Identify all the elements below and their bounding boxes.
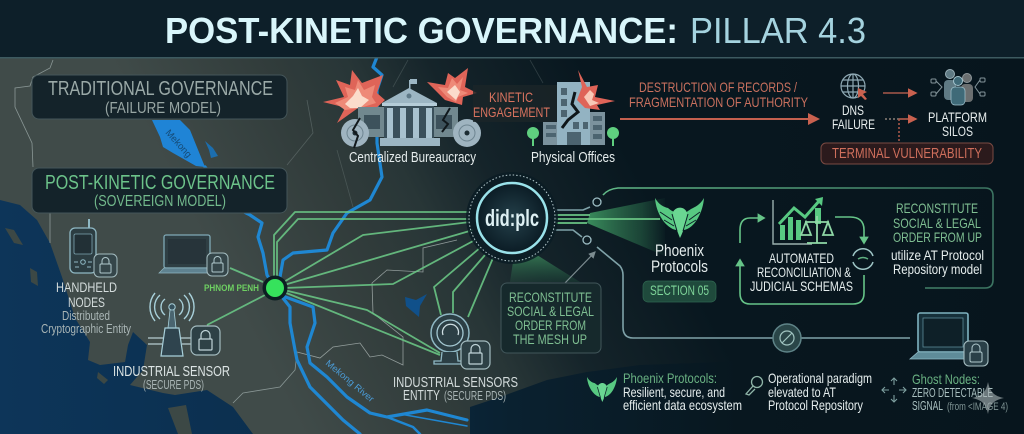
data discs (341, 119, 369, 147)
arrow: destruction to DNS failure (620, 118, 818, 120)
arrow: terminal vulnerability link (885, 119, 916, 143)
label: industrial sensors entity: ENTITY (403, 388, 440, 404)
title: PILLAR 4.3 (690, 10, 866, 51)
label: handheld nodes (41, 279, 131, 336)
legend: operational paradigm: Operational paradigm (768, 370, 872, 386)
node: did:plc (466, 172, 558, 264)
text: reconstitute from up: RECONSTITUTE (896, 200, 978, 216)
icon: sync (853, 249, 873, 269)
label: DNS failure: DNS (842, 102, 864, 118)
callout: terminal vulnerability (821, 143, 993, 164)
icon: sparkle watermark (972, 382, 1004, 414)
text: reconstitute from up: Repository model (893, 261, 982, 277)
icon: DNS globe (841, 74, 867, 100)
callout: kinetic engagement: ENGAGEMENT (473, 104, 550, 120)
callout: terminal vulnerability: TERMINAL VULNERABILITY (832, 145, 982, 162)
lake: Mekong (152, 120, 218, 167)
panel: post-kinetic governance label: POST-KINETIC GOVERNANCE (45, 172, 275, 194)
icon: physical offices (527, 70, 619, 146)
connection lines from did:plc (553, 188, 993, 338)
loop arrows (740, 217, 864, 304)
inland lake (405, 294, 427, 317)
lake: Mekong: Mekong (163, 128, 194, 160)
callout: reconstitute from the mesh up: ORDER FROM (515, 317, 586, 333)
legend: operational paradigm (768, 370, 872, 413)
title: POST-KINETIC GOVERNANCE: (165, 10, 678, 51)
label: industrial sensors entity (393, 375, 518, 404)
label: handheld nodes: Cryptographic Entity (41, 321, 131, 336)
text: automated reconciliation: JUDICIAL SCHEMAS (750, 278, 853, 294)
icon: chart and scales (773, 197, 833, 244)
legend: phoenix protocols: Phoenix Protocols: (623, 370, 717, 386)
callout arrow to key node (565, 252, 595, 283)
label: industrial sensor: (SECURE PDS) (143, 378, 204, 392)
building portico (384, 106, 434, 139)
label: DNS failure (832, 102, 875, 132)
icon: small phoenix (587, 377, 617, 402)
icon: laptop node (159, 235, 228, 276)
icon: ghost laptop with lock (910, 313, 988, 366)
rivers (205, 57, 467, 434)
hub: Phnom Penh (204, 276, 288, 300)
icon: industrial sensors entity camera (431, 314, 490, 369)
icon: platform silos people (931, 70, 985, 105)
label: handheld nodes: HANDHELD (56, 279, 117, 295)
callout: kinetic engagement: KINETIC (489, 89, 533, 105)
legend: phoenix protocols: efficient data ecosystem (623, 397, 742, 413)
icon: industrial sensor (148, 293, 220, 356)
icon: blocked circle (773, 324, 801, 352)
text: automated reconciliation: AUTOMATED (769, 250, 834, 266)
callout: reconstitute from the mesh up: RECONSTITUTE (509, 289, 592, 305)
label: DNS failure: FAILURE (832, 116, 875, 132)
explosion and building: centralized bureaucracy (323, 68, 481, 148)
map land mass (0, 57, 780, 434)
badge: section 05 (643, 281, 716, 302)
label: centralized bureaucracy: Centralized Bureaucracy (349, 150, 477, 166)
text: automated reconciliation (750, 250, 853, 294)
text: reconstitute from up: utilize AT Protocol (891, 247, 984, 263)
callout: kinetic engagement (473, 85, 557, 122)
callout: reconstitute from the mesh up: SOCIAL & LEGAL (507, 303, 594, 319)
text: automated reconciliation: RECONCILIATION & (757, 264, 851, 280)
label: handheld nodes: Distributed (62, 308, 110, 323)
icon: four-way arrows (882, 378, 906, 402)
river label: Mekong River (324, 358, 376, 404)
label: industrial sensor (113, 364, 230, 392)
legend: operational paradigm: elevated to AT (768, 384, 836, 400)
header band (0, 0, 1024, 58)
map islands (5, 228, 192, 434)
label: phoenix protocols: Protocols (651, 257, 708, 276)
mesh lines (207, 212, 493, 355)
label: industrial sensors entity: (SECURE PDS) (444, 389, 506, 403)
panel: traditional governance label (32, 75, 287, 119)
legend: ghost nodes: Ghost Nodes: (912, 371, 980, 387)
label: industrial sensor: INDUSTRIAL SENSOR (113, 364, 230, 380)
callout: reconstitute from the mesh up (501, 283, 601, 353)
text: destruction of records: FRAGMENTATION OF AUTHORITY (629, 94, 809, 110)
label: platform silos: SILOS (942, 123, 973, 139)
label: handheld nodes: NODES (68, 294, 105, 310)
callout: reconstitute from the mesh up: THE MESH UP (513, 331, 587, 347)
badge: section 05: SECTION 05 (650, 283, 709, 298)
legend: phoenix protocols: Resilient, secure, and (623, 384, 725, 400)
text: destruction of records (629, 79, 809, 110)
text: reconstitute from up (891, 200, 984, 277)
node: did:plc: did:plc (485, 205, 539, 231)
label: phoenix protocols (651, 241, 708, 276)
arrow: DNS to platform silos (883, 92, 916, 94)
panel: traditional governance label: TRADITIONAL GOVERNANCE (48, 78, 273, 100)
legend: phoenix protocols (623, 370, 742, 413)
text: reconstitute from up: SOCIAL & LEGAL (893, 215, 981, 231)
legend: operational paradigm: Protocol Repository (768, 397, 863, 413)
legend: ghost nodes (912, 371, 1008, 413)
green beams (510, 198, 665, 282)
icon: key (746, 376, 762, 395)
country borders (15, 60, 543, 403)
panel: post-kinetic governance label: (SOVEREIGN MODEL) (94, 193, 226, 210)
building wings (358, 107, 458, 137)
text: destruction of records: DESTRUCTION OF RECORDS / (639, 79, 797, 95)
panel: traditional governance label: (FAILURE MODEL) (105, 100, 221, 117)
icon: phoenix (655, 198, 704, 238)
hub: Phnom Penh: PHNOM PENH (204, 283, 259, 294)
label: platform silos: PLATFORM (928, 109, 987, 125)
legend: ghost nodes: SIGNAL (912, 398, 943, 413)
text: reconstitute from up: ORDER FROM UP (893, 229, 982, 245)
icon: handheld node (70, 219, 117, 277)
label: platform silos (928, 109, 987, 139)
label: phoenix protocols: Phoenix (655, 241, 704, 260)
panel: post-kinetic governance label (32, 168, 287, 213)
label: industrial sensors entity: INDUSTRIAL SENSORS (393, 375, 518, 391)
label: physical offices: Physical Offices (531, 150, 615, 166)
